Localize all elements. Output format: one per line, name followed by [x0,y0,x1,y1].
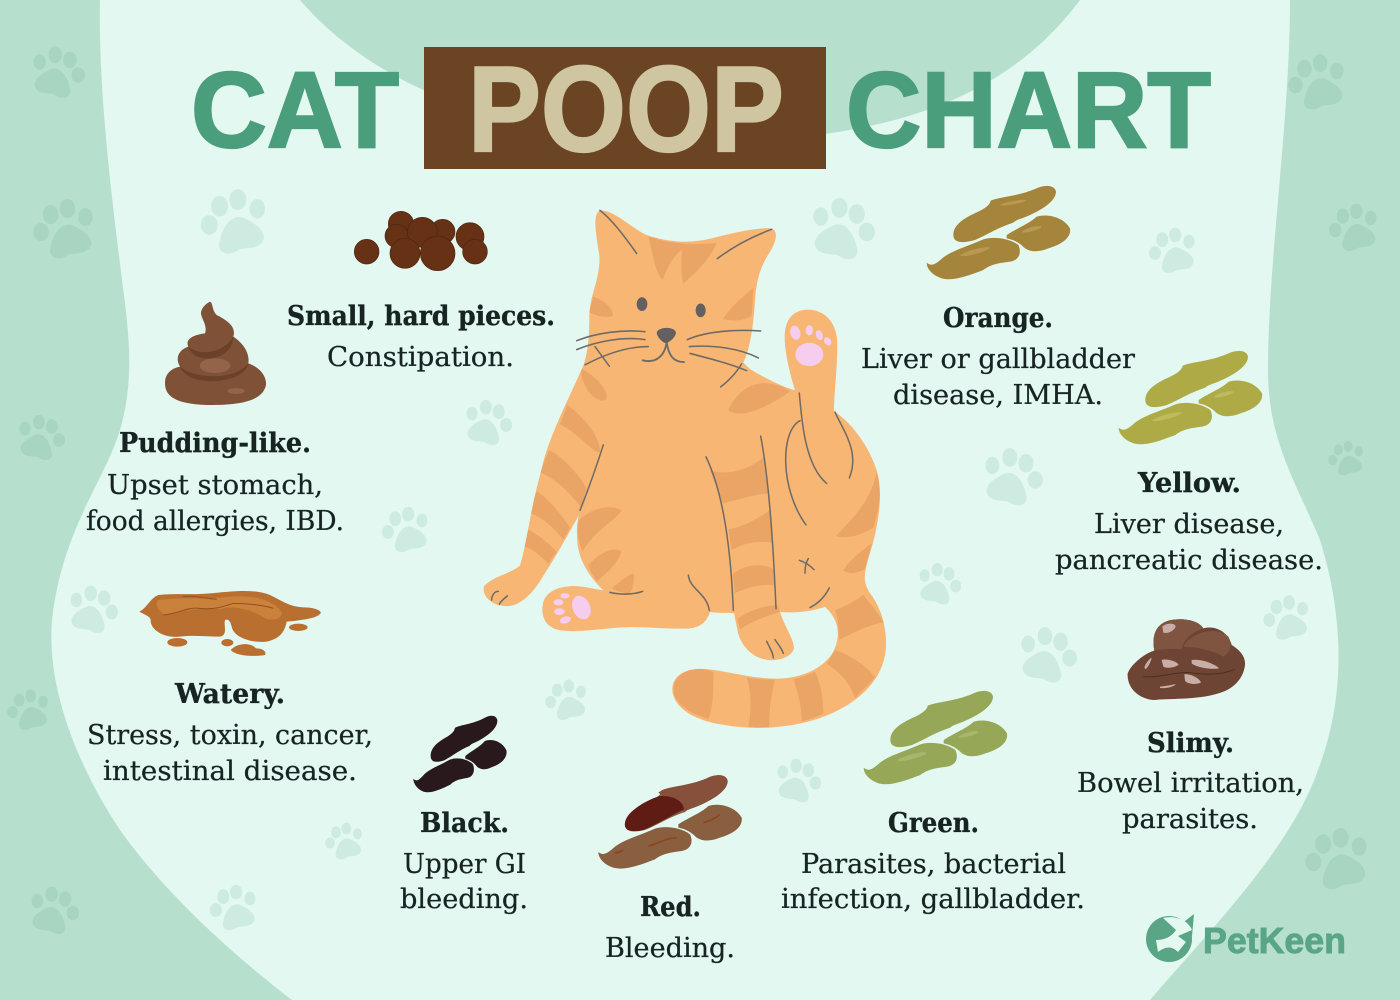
icon: yellow stool [1119,351,1262,444]
cat linework [492,210,853,658]
text: pudding-like: food allergies, IBD. [86,506,344,537]
text: red: Red. [640,892,701,923]
text: yellow: pancreatic disease. [1055,545,1323,576]
text: green: infection, gallbladder. [781,884,1085,915]
icon: watery stool [139,591,321,656]
text: pudding-like [86,428,344,537]
text: orange: disease, IMHA. [893,380,1103,411]
title [191,41,1211,177]
text: orange: Liver or gallbladder [861,344,1135,375]
cat face [637,297,647,311]
text: red [605,892,735,964]
text: watery [87,679,373,787]
text: black [400,808,528,915]
icon: green stool [864,691,1007,784]
title: CHART [846,49,1211,170]
text: watery: Watery. [174,679,285,710]
text: slimy: Bowel irritation, [1077,768,1304,799]
text: orange [861,303,1135,411]
text: yellow: Liver disease, [1094,509,1284,540]
text: small, hard pieces: Constipation. [327,342,514,373]
text: black: Black. [420,808,509,839]
cat body [484,210,886,728]
text: yellow [1055,468,1323,576]
cat paw pads [553,324,833,625]
logo: PetKeen: PetKeen [1203,920,1346,961]
icon: orange stool [927,186,1070,279]
text: green: Green. [888,808,979,839]
text: watery: Stress, toxin, cancer, [87,720,373,751]
text: small, hard pieces: Small, hard pieces. [287,301,555,332]
illustration: ginger cat [484,210,886,728]
text: slimy: parasites. [1122,804,1258,835]
text: watery: intestinal disease. [103,756,357,787]
text: green [781,808,1085,915]
text: pudding-like: Pudding-like. [119,428,311,459]
text: yellow: Yellow. [1137,468,1241,499]
icon: black stool [413,716,507,792]
title: CAT [191,49,399,170]
title: POOP [468,41,784,177]
icon: small hard pieces [354,211,487,271]
text: slimy [1077,728,1304,835]
text: slimy: Slimy. [1147,728,1234,759]
icon: slimy stool [1128,619,1245,700]
text: black: bleeding. [400,884,528,915]
text: pudding-like: Upset stomach, [107,470,323,501]
text: orange: Orange. [943,303,1053,334]
text: small, hard pieces [287,301,555,373]
icon: red stool [598,775,742,869]
text: black: Upper GI [403,849,526,880]
icon: pudding-like stool [165,302,266,405]
text: green: Parasites, bacterial [801,849,1066,880]
cat stripes [518,236,883,728]
logo: PetKeen [1146,914,1346,962]
text: red: Bleeding. [605,933,735,964]
title highlight box [424,47,826,169]
